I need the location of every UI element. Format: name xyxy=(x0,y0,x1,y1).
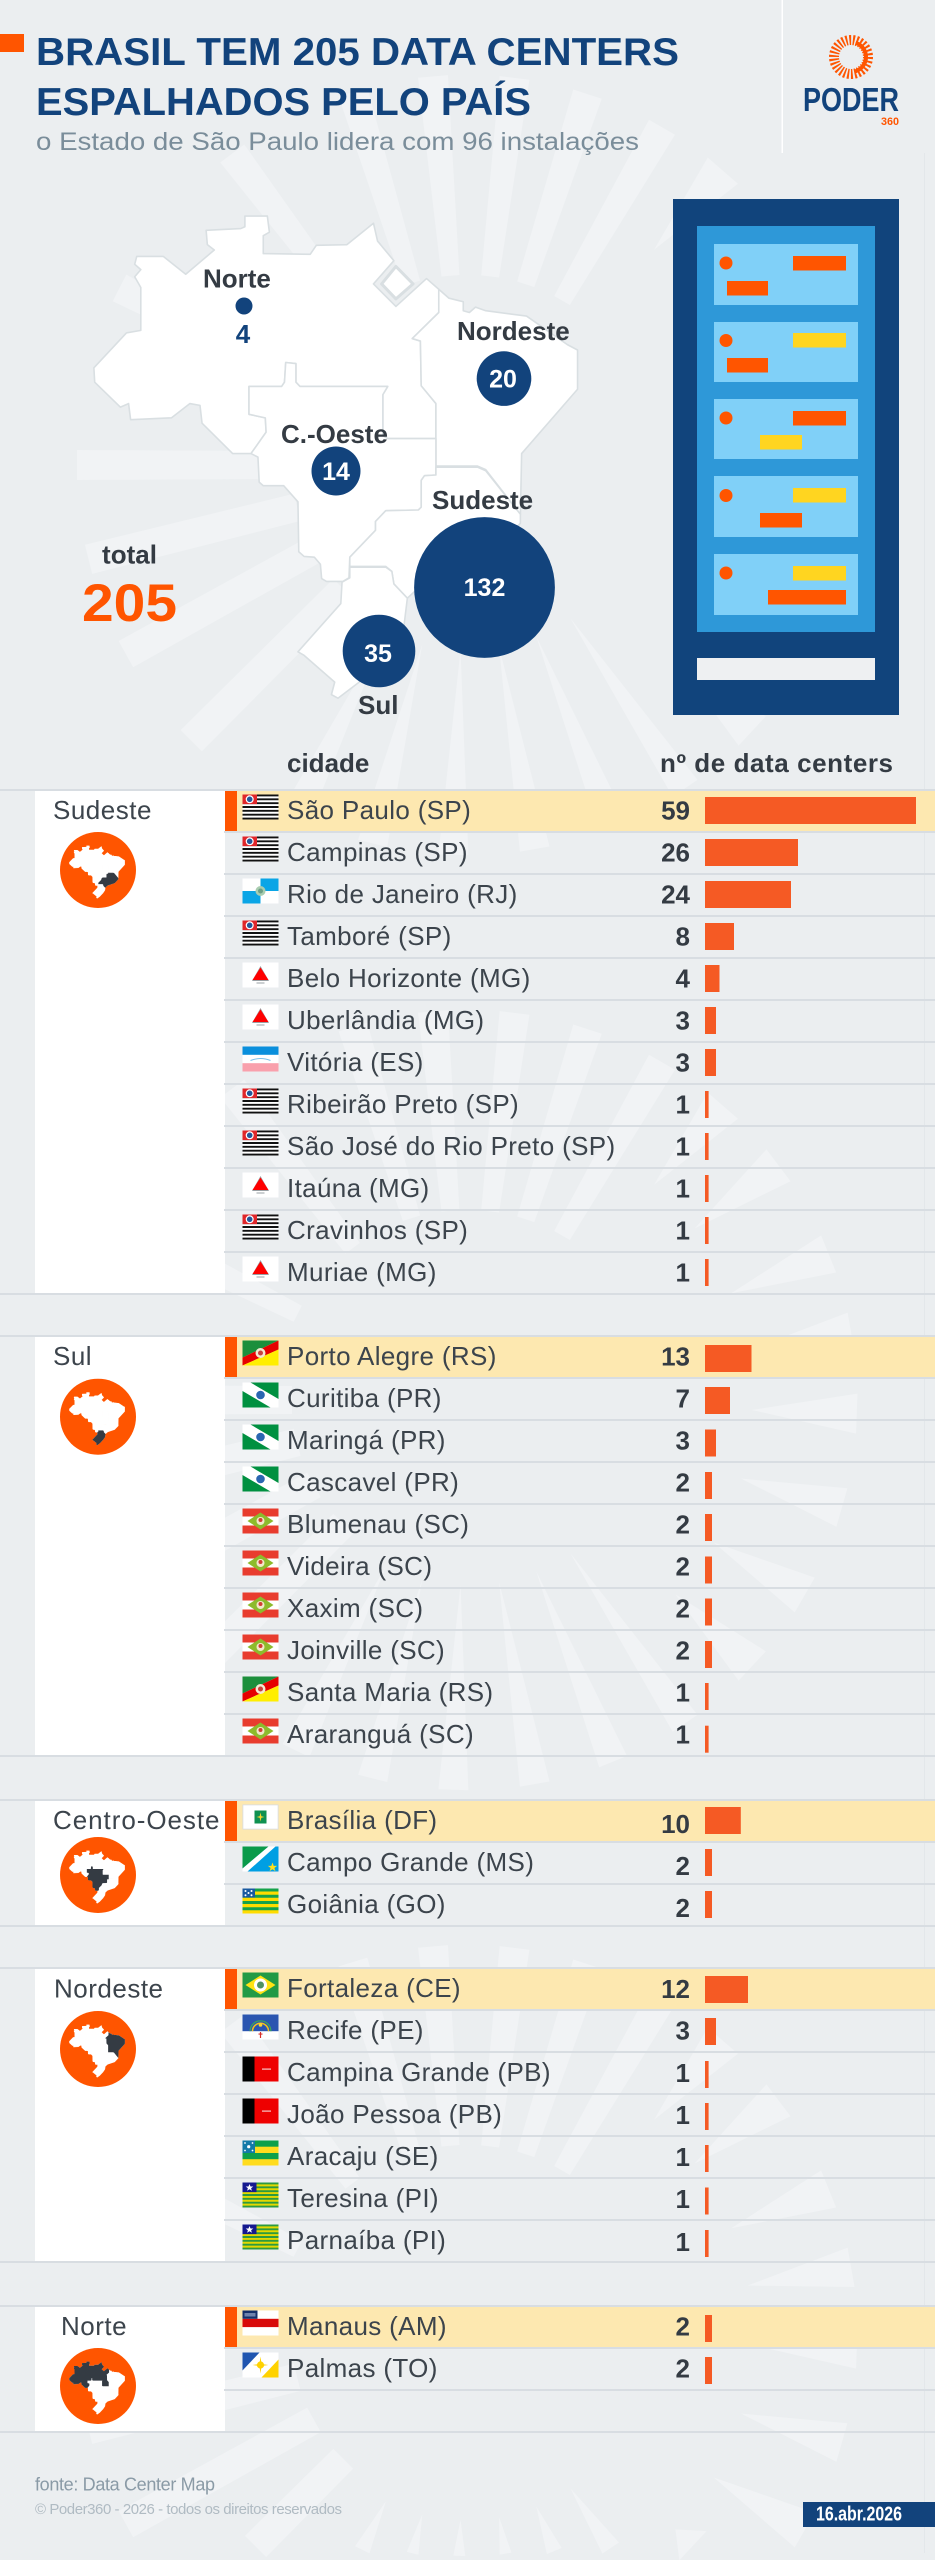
row: Curitiba: 7 xyxy=(676,1384,690,1414)
region: Centro-Oeste: C.-Oeste xyxy=(281,419,388,449)
title: BRASIL TEM 205 DATA CENTERS xyxy=(36,31,679,74)
icon: map Norte xyxy=(60,2348,136,2424)
row: Belo Horizonte xyxy=(224,962,935,1001)
regions outline xyxy=(94,216,578,698)
region: Norte: Norte xyxy=(203,264,271,294)
row: Uberlândia xyxy=(224,1004,935,1043)
row: Campo Grande xyxy=(224,1846,935,1885)
region: Centro-Oeste xyxy=(281,419,388,496)
row: Muriae xyxy=(242,1256,709,1288)
row: Blumenau xyxy=(224,1508,935,1547)
row: Itaúna: Itaúna (MG) xyxy=(287,1173,430,1203)
row: Recife xyxy=(224,2014,935,2053)
region: Sudeste xyxy=(414,485,555,658)
row: Tamboré xyxy=(224,920,935,959)
row: Rio de Janeiro: Rio de Janeiro (RJ) xyxy=(287,879,518,909)
row: Cravinhos xyxy=(224,1214,935,1253)
row: Brasília: Brasília (DF) xyxy=(287,1805,437,1835)
row: Araranguá xyxy=(242,1718,709,1753)
region label: Sudeste: Sudeste xyxy=(53,795,152,825)
region: Centro-Oeste: 14 xyxy=(322,458,350,486)
region: Sul: 35 xyxy=(364,640,392,668)
region: Norte: 4 xyxy=(236,319,251,349)
row: Palmas: 2 xyxy=(676,2354,690,2384)
row: Santa Maria: 1 xyxy=(676,1678,690,1708)
region: Sudeste: 132 xyxy=(464,574,505,602)
row: João Pessoa xyxy=(224,2098,935,2137)
total: total xyxy=(102,540,157,570)
row: Recife: 3 xyxy=(676,2016,690,2046)
region: Norte xyxy=(203,264,271,349)
row: Parnaíba xyxy=(242,2224,709,2257)
row: Cravinhos: 1 xyxy=(676,1216,690,1246)
logo: Poder360 xyxy=(803,38,899,128)
row: Vitória: Vitória (ES) xyxy=(287,1047,424,1077)
row: Joinville xyxy=(224,1634,935,1673)
row: Belo Horizonte: Belo Horizonte (MG) xyxy=(287,963,531,993)
table header: nº de data centers xyxy=(660,748,893,778)
row: Vitória xyxy=(224,1046,935,1085)
row: Teresina: Teresina (PI) xyxy=(287,2183,439,2213)
row: Rio de Janeiro xyxy=(224,878,935,917)
table header: cidade xyxy=(287,748,369,778)
row: Uberlândia: Uberlândia (MG) xyxy=(287,1005,484,1035)
row: Aracaju: 1 xyxy=(676,2142,690,2172)
region: Nordeste: 20 xyxy=(489,366,517,394)
table header xyxy=(0,748,935,791)
total: 205 xyxy=(82,574,177,633)
row: Aracaju: Aracaju (SE) xyxy=(287,2141,439,2171)
row: Cascavel xyxy=(224,1466,935,1505)
row: Tamboré: 8 xyxy=(676,922,690,952)
row: Ribeirão Preto xyxy=(224,1088,935,1127)
row: Manaus: 2 xyxy=(676,2312,690,2342)
row: Teresina: 1 xyxy=(676,2184,690,2214)
row: Uberlândia: 3 xyxy=(676,1006,690,1036)
row: Videira: Videira (SC) xyxy=(287,1551,432,1581)
row: Campo Grande: 2 xyxy=(676,1851,690,1881)
row: João Pessoa: João Pessoa (PB) xyxy=(287,2099,502,2129)
row: Campinas: Campinas (SP) xyxy=(287,837,468,867)
row: Brasília: 10 xyxy=(661,1809,690,1839)
row: Videira: 2 xyxy=(676,1552,690,1582)
panel: Sudeste xyxy=(0,791,935,1295)
icon: map Sul xyxy=(60,1379,136,1455)
row: Fortaleza xyxy=(224,1969,935,2011)
row: Manaus: Manaus (AM) xyxy=(287,2311,447,2341)
row: Curitiba xyxy=(224,1382,935,1421)
row: Manaus xyxy=(224,2307,935,2349)
subtitle: o Estado de São Paulo lidera com 96 instalações xyxy=(36,128,639,156)
region label: Sul: Sul xyxy=(53,1341,92,1371)
icon: map Nordeste xyxy=(60,2011,136,2087)
row: Fortaleza: 12 xyxy=(661,1974,690,2004)
row: Fortaleza: Fortaleza (CE) xyxy=(287,1973,461,2003)
row: Santa Maria: Santa Maria (RS) xyxy=(287,1677,493,1707)
row: Rio de Janeiro: 24 xyxy=(661,880,691,910)
panel: Centro-Oeste xyxy=(0,1799,935,1927)
row: Maringá xyxy=(224,1424,935,1463)
row: São Paulo: São Paulo (SP) xyxy=(287,795,471,825)
date badge: 16.abr.2026 xyxy=(816,2504,902,2526)
row: Maringá: Maringá (PR) xyxy=(287,1425,446,1455)
copyright: © Poder360 - 2026 - todos os direitos reservados xyxy=(35,2501,342,2518)
row: Teresina xyxy=(224,2182,935,2221)
row: São Paulo: 59 xyxy=(661,796,690,826)
row: Cascavel: Cascavel (PR) xyxy=(287,1467,459,1497)
row: Ribeirão Preto: 1 xyxy=(676,1090,690,1120)
row: Goiânia: 2 xyxy=(676,1893,690,1923)
row: Joinville: Joinville (SC) xyxy=(287,1635,445,1665)
row: Campinas xyxy=(224,836,935,875)
row: Belo Horizonte: 4 xyxy=(676,964,691,994)
row: Vitória: 3 xyxy=(676,1048,690,1078)
row: Muriae: 1 xyxy=(676,1258,690,1288)
row: Maringá: 3 xyxy=(676,1426,690,1456)
row: Joinville: 2 xyxy=(676,1636,690,1666)
map of Brazil by region xyxy=(94,216,578,720)
row: Porto Alegre: 13 xyxy=(661,1342,690,1372)
row: Campina Grande xyxy=(224,2056,935,2095)
row: Blumenau: 2 xyxy=(676,1510,690,1540)
row: Blumenau: Blumenau (SC) xyxy=(287,1509,469,1539)
region: Nordeste: Nordeste xyxy=(457,316,570,346)
row: Xaxim: Xaxim (SC) xyxy=(287,1593,423,1623)
row: Araranguá: Araranguá (SC) xyxy=(287,1719,474,1749)
logo: Poder360: PODER xyxy=(803,81,899,118)
row: São José do Rio Preto: 1 xyxy=(676,1132,690,1162)
source: fonte: Data Center Map xyxy=(35,2475,215,2495)
icon: server rack xyxy=(673,199,899,715)
row: Xaxim xyxy=(224,1592,935,1631)
row: Campina Grande: Campina Grande (PB) xyxy=(287,2057,551,2087)
divider xyxy=(782,0,783,153)
region: Nordeste xyxy=(457,316,570,406)
header xyxy=(0,0,899,156)
row: Campo Grande: Campo Grande (MS) xyxy=(287,1847,534,1877)
row: Goiânia xyxy=(242,1888,712,1923)
row: Araranguá: 1 xyxy=(676,1720,690,1750)
row: Brasília xyxy=(224,1801,935,1843)
logo: Poder360: 360 xyxy=(881,116,899,128)
region label: Nordeste: Nordeste xyxy=(54,1974,164,2004)
row: São José do Rio Preto: São José do Rio Preto (SP) xyxy=(287,1131,615,1161)
row: Santa Maria xyxy=(224,1676,935,1715)
region: Sudeste: Sudeste xyxy=(432,485,533,515)
row: Palmas xyxy=(224,2352,935,2391)
row: Cascavel: 2 xyxy=(676,1468,690,1498)
row: Campinas: 26 xyxy=(661,838,690,868)
row: Curitiba: Curitiba (PR) xyxy=(287,1383,442,1413)
row: Goiânia: Goiânia (GO) xyxy=(287,1889,446,1919)
row: Itaúna xyxy=(224,1172,935,1211)
row: Campina Grande: 1 xyxy=(676,2058,690,2088)
row: João Pessoa: 1 xyxy=(676,2100,690,2130)
row: Parnaíba: Parnaíba (PI) xyxy=(287,2225,446,2255)
row: Videira xyxy=(224,1550,935,1589)
row: Tamboré: Tamboré (SP) xyxy=(287,921,452,951)
row: Aracaju xyxy=(224,2140,935,2179)
panel: Nordeste xyxy=(0,1967,935,2263)
panel: Sul xyxy=(0,1335,935,1757)
row: Porto Alegre: Porto Alegre (RS) xyxy=(287,1341,497,1371)
region label: Norte: Norte xyxy=(61,2311,127,2341)
row: Ribeirão Preto: Ribeirão Preto (SP) xyxy=(287,1089,519,1119)
region label: Centro-Oeste: Centro-Oeste xyxy=(53,1805,220,1835)
row: São Paulo xyxy=(224,791,935,833)
accent square xyxy=(0,34,24,52)
row: Muriae: Muriae (MG) xyxy=(287,1257,437,1287)
region: Sul: Sul xyxy=(358,690,398,720)
icon: map Centro-Oeste xyxy=(60,1837,136,1913)
row: São José do Rio Preto xyxy=(224,1130,935,1169)
region: Sul xyxy=(343,615,415,720)
row: Cravinhos: Cravinhos (SP) xyxy=(287,1215,468,1245)
panel: Norte xyxy=(0,2305,935,2433)
icon: map Sudeste xyxy=(60,832,136,908)
row: Itaúna: 1 xyxy=(676,1174,690,1204)
total xyxy=(82,540,177,633)
row: Recife: Recife (PE) xyxy=(287,2015,424,2045)
row: Palmas: Palmas (TO) xyxy=(287,2353,438,2383)
row: Porto Alegre xyxy=(224,1337,935,1379)
title: ESPALHADOS PELO PAÍS xyxy=(36,80,531,124)
row: Parnaíba: 1 xyxy=(676,2227,690,2257)
row: Xaxim: 2 xyxy=(676,1594,690,1624)
